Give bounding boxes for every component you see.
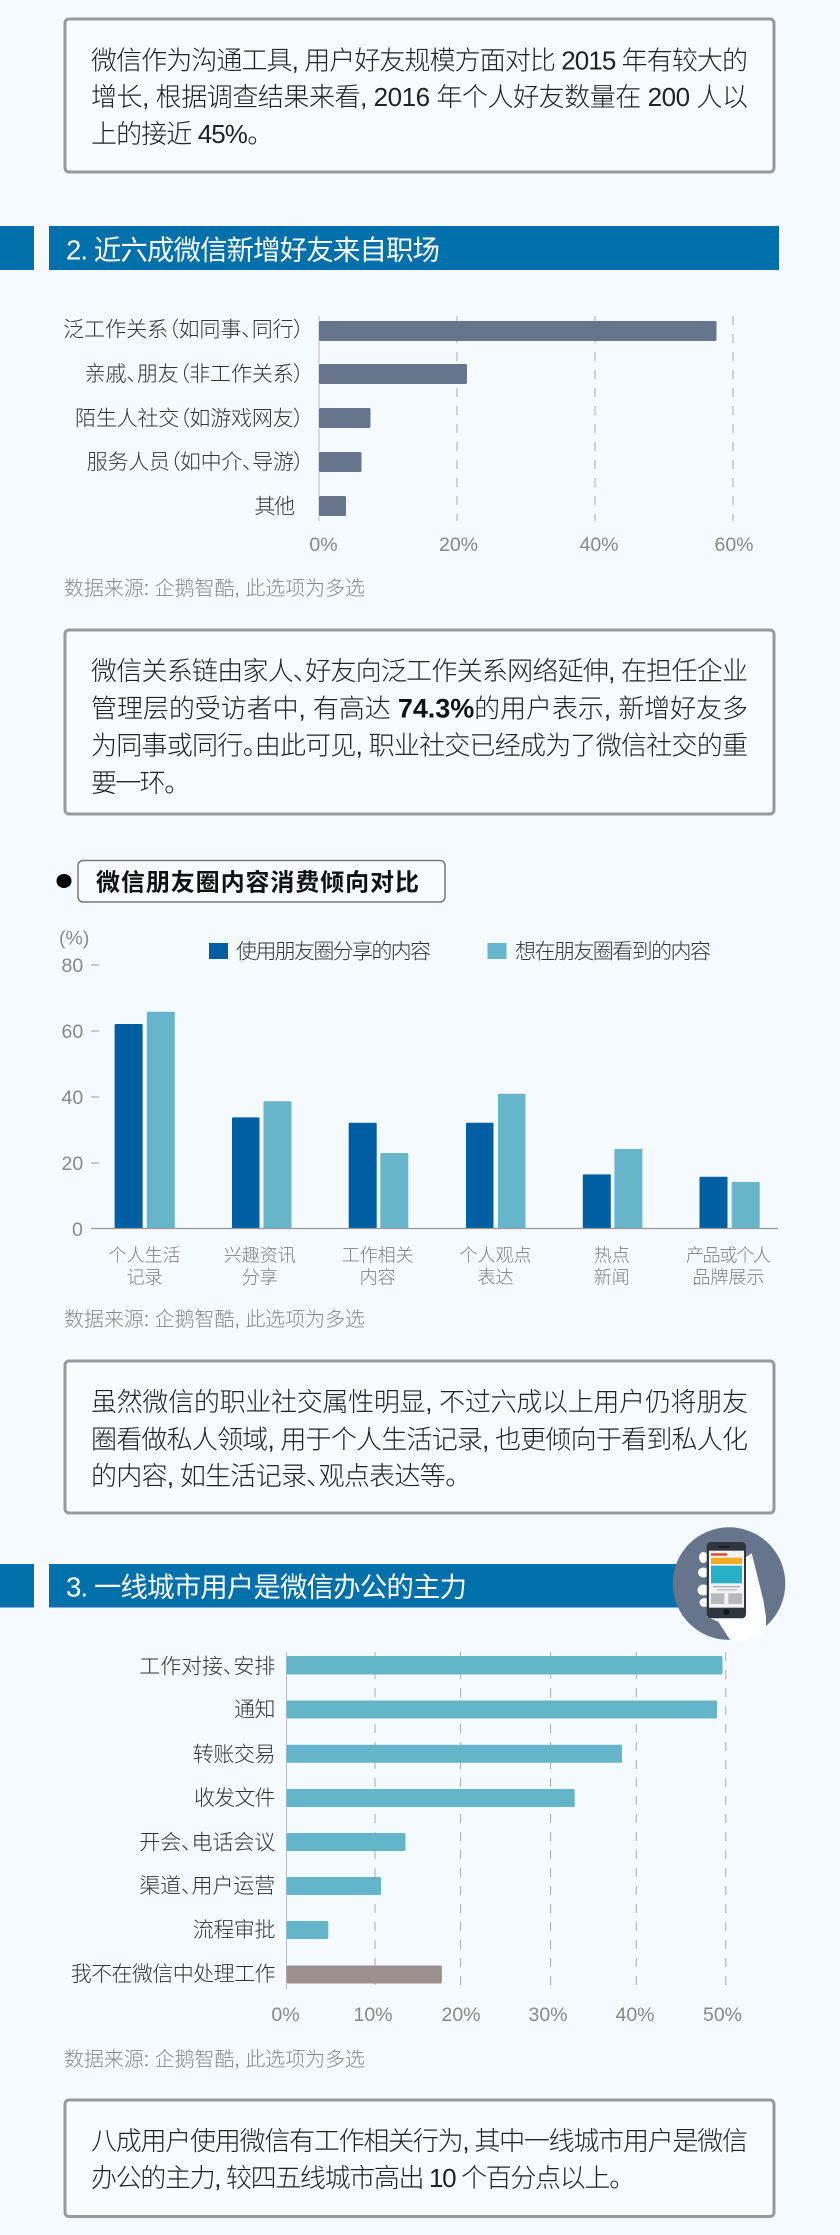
bar chart: work behaviours on WeChat [71, 1652, 742, 2026]
panel: workplace social callout [65, 630, 774, 814]
callout text: 上的接近 45%。 [91, 119, 260, 149]
category labels: 产品或个人 [686, 1246, 771, 1266]
category labels: 分享 [242, 1268, 278, 1288]
category labels: 表达 [478, 1268, 514, 1288]
category labels: 兴趣资讯 [224, 1246, 296, 1266]
series: share [115, 1024, 728, 1228]
legend [209, 940, 711, 964]
callout text: 微信关系链由家人、好友向泛工作关系网络延伸, 在担任企业 [91, 656, 748, 686]
bars [286, 1656, 722, 1939]
legend: 使用朋友圈分享的内容 [236, 940, 431, 964]
hand [707, 1553, 766, 1640]
subheading: moments content comparison [56, 860, 445, 902]
category labels: 收发文件 [194, 1787, 276, 1810]
phone body [707, 1542, 746, 1618]
axis labels: 50% [703, 2004, 742, 2026]
source note 2: 数据来源: 企鹅智酷, 此选项为多选 [64, 1308, 365, 1331]
category labels: 通知 [234, 1698, 276, 1722]
grouped bar chart: moments content [59, 928, 778, 1288]
category labels: 工作相关 [342, 1246, 414, 1266]
axis labels: 0% [309, 534, 338, 556]
category labels: 品牌展示 [692, 1268, 764, 1288]
category labels: 泛工作关系（如同事、同行） [63, 318, 304, 342]
callout text: 增长, 根据调查结果来看, 2016 年个人好友数量在 200 人以 [91, 82, 748, 112]
category labels: 工作对接、安排 [139, 1656, 275, 1678]
category labels: 个人生活 [109, 1246, 181, 1266]
category labels: 其他 [254, 496, 295, 518]
callout text: 八成用户使用微信有工作相关行为, 其中一线城市用户是微信 [91, 2126, 748, 2156]
category labels: 内容 [360, 1268, 396, 1288]
callout text [91, 2126, 748, 2193]
section heading 3: 3. 一线城市用户是微信办公的主力 [66, 1572, 467, 1602]
category labels [71, 1656, 276, 1986]
legend: 想在朋友圈看到的内容 [515, 940, 711, 964]
axis labels [309, 534, 754, 556]
y axis: 40 [62, 1087, 83, 1109]
callout text: 的内容, 如生活记录、观点表达等。 [91, 1461, 458, 1491]
callout text: 虽然微信的职业社交属性明显, 不过六成以上用户仍将朋友 [91, 1387, 748, 1417]
y axis: 0 [72, 1219, 83, 1241]
panel: friend scale callout [65, 19, 774, 172]
category labels [109, 1246, 771, 1288]
category labels: 服务人员（如中介、导游） [87, 451, 304, 474]
axis labels: 30% [528, 2004, 568, 2026]
callout text: 微信作为沟通工具, 用户好友规模方面对比 2015 年有较大的 [91, 46, 748, 76]
subheading: moments content comparison: 微信朋友圈内容消费倾向对比 [96, 870, 419, 896]
axis labels: 10% [353, 2004, 393, 2026]
panel: first-tier cities callout [65, 2100, 774, 2216]
callout text [91, 1387, 748, 1491]
category labels: 开会、电话会议 [139, 1832, 275, 1854]
category labels: 转账交易 [193, 1744, 276, 1766]
y axis: (%) [59, 928, 89, 950]
axis labels: 60% [714, 534, 754, 556]
callout text: 管理层的受访者中, 有高达 74.3%的用户表示, 新增好友多 [91, 693, 748, 723]
category labels: 渠道、用户运营 [139, 1875, 275, 1898]
y axis: 60 [62, 1021, 83, 1043]
axis labels: 20% [441, 2004, 481, 2026]
category labels [63, 318, 304, 518]
section heading 3 [0, 1564, 689, 1608]
panel: personal domain callout [65, 1361, 774, 1513]
y axis [59, 928, 99, 1241]
axis labels: 20% [439, 534, 478, 556]
axis labels: 0% [271, 2004, 300, 2026]
category labels: 陌生人社交（如游戏网友） [75, 408, 304, 430]
y axis: 20 [62, 1153, 83, 1175]
category labels: 热点 [594, 1246, 630, 1266]
screen content [711, 1553, 727, 1556]
category labels: 我不在微信中处理工作 [71, 1963, 276, 1986]
source note 1: 数据来源: 企鹅智酷, 此选项为多选 [64, 577, 365, 600]
category labels: 新闻 [594, 1268, 630, 1288]
icon: hand holding phone [673, 1527, 785, 1640]
series: want to see [147, 1012, 760, 1228]
callout text [91, 46, 748, 149]
y axis: 80 [62, 955, 83, 977]
axis labels: 40% [615, 2004, 655, 2026]
bar chart: new friend sources [63, 316, 754, 556]
callout text: 为同事或同行。由此可见, 职业社交已经成为了微信社交的重 [91, 730, 748, 760]
axis labels: 40% [579, 534, 619, 556]
category labels: 流程审批 [193, 1919, 276, 1942]
category labels: 记录 [127, 1268, 163, 1288]
section heading 2: 2. 近六成微信新增好友来自职场 [66, 234, 440, 266]
category labels: 个人观点 [460, 1246, 532, 1266]
callout text: 要一环。 [91, 768, 177, 798]
bars [319, 321, 716, 516]
callout text [91, 656, 748, 798]
callout text: 办公的主力, 较四五线城市高出 10 个百分点以上。 [91, 2163, 622, 2193]
axis labels [271, 2004, 742, 2026]
category labels: 亲戚、朋友（非工作关系） [85, 363, 304, 386]
source note 3: 数据来源: 企鹅智酷, 此选项为多选 [64, 2048, 365, 2071]
section heading 2 [0, 226, 779, 270]
callout text: 圈看做私人领域, 用于个人生活记录, 也更倾向于看到私人化 [91, 1424, 748, 1454]
